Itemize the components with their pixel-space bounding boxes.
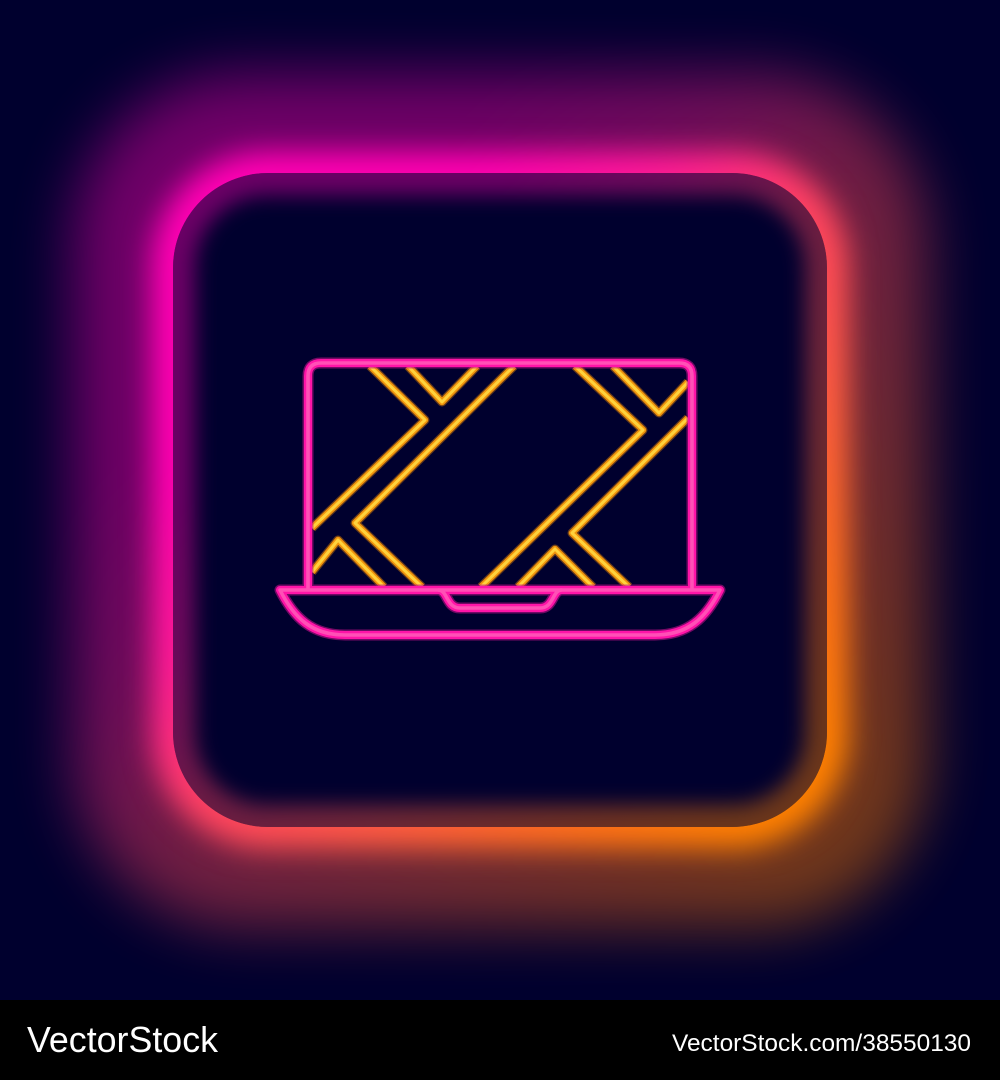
laptop screen frame and base (280, 363, 720, 635)
footer logo text: VectorStock (27, 1019, 219, 1060)
footer bar (0, 1000, 1000, 1080)
rounded square panel with inner glow (173, 173, 827, 827)
footer image id text: VectorStock.com/38550130 (672, 1030, 971, 1057)
screen pattern lines (312, 366, 688, 587)
